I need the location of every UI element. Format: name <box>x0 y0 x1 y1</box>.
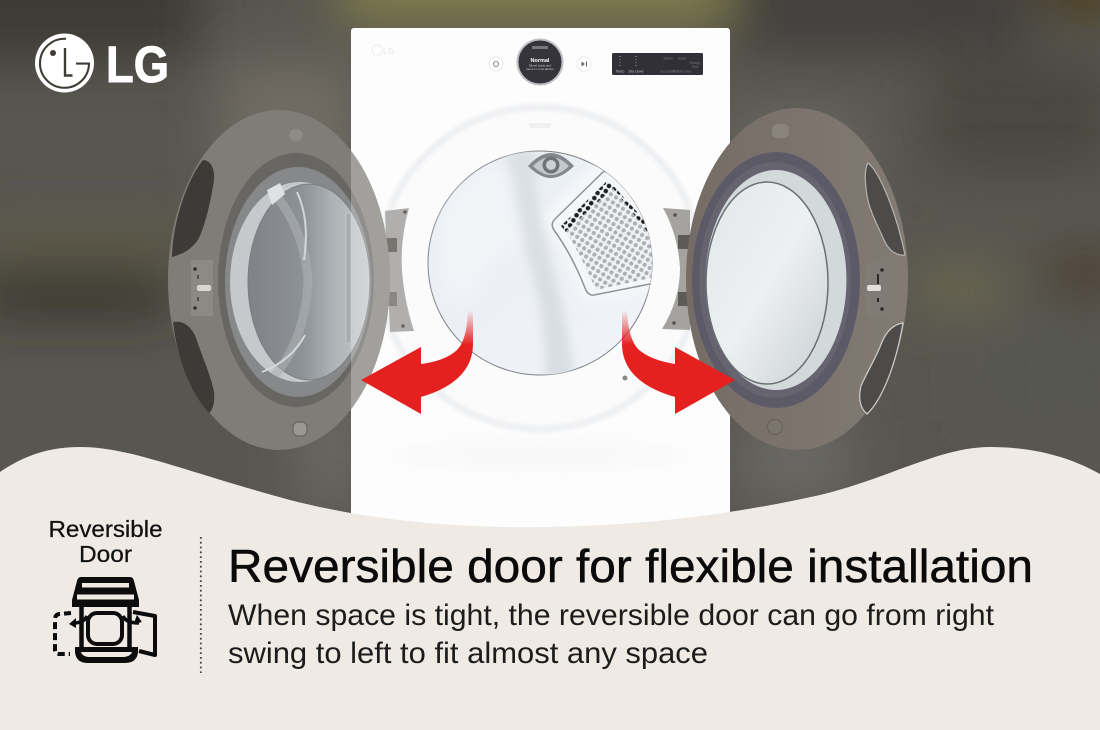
dotted divider <box>200 537 202 673</box>
right red arrow <box>622 310 735 414</box>
icon label: Door <box>79 541 132 567</box>
left door glass <box>230 182 370 382</box>
moisture sensor <box>528 153 574 178</box>
display panel: Damp <box>678 56 686 60</box>
right hinge plate <box>662 208 693 330</box>
left door knob top <box>290 128 302 142</box>
right door knob top <box>772 124 789 138</box>
description: swing to left to fit almost any space <box>228 637 708 670</box>
control dial <box>518 40 562 84</box>
power button <box>489 57 503 71</box>
left door gasket <box>218 153 374 407</box>
display panel: Eco Dash <box>661 70 675 74</box>
display panel: Temp <box>616 70 624 74</box>
control dial: items in most fabrics <box>526 67 554 71</box>
heading: Reversible door for flexible installation <box>228 540 1033 592</box>
icon: reversible door dryer <box>55 577 155 663</box>
right door ring <box>686 108 908 450</box>
right door latch <box>865 262 892 316</box>
display panel: Steam <box>663 56 673 60</box>
translucent door overlap on dryer <box>351 151 390 409</box>
left door knob bottom <box>293 422 307 436</box>
display panel: Energy <box>690 61 700 65</box>
display panel <box>612 53 703 75</box>
description: When space is tight, the reversible door can go from right <box>228 599 995 632</box>
cream wave panel <box>0 447 1100 730</box>
display panel: Dry Level <box>629 70 644 74</box>
left red arrow <box>361 310 473 414</box>
description <box>228 599 995 670</box>
left door handle top <box>172 160 214 257</box>
drum baffle shading <box>504 150 574 380</box>
right door knob bottom <box>768 420 782 434</box>
drum sensor screw <box>622 376 628 380</box>
right door <box>686 108 908 450</box>
icon label: Reversible <box>48 516 162 542</box>
dryer lower shadow <box>390 443 690 467</box>
dryer door opening ring <box>376 104 704 432</box>
right door glass <box>706 182 828 384</box>
drum interior <box>428 150 660 380</box>
start button <box>577 57 591 71</box>
lint filter grille <box>552 172 660 295</box>
right door glass ring <box>706 170 846 390</box>
right door handle bottom <box>860 323 903 414</box>
left hinge plate <box>384 208 414 332</box>
LG logo <box>35 34 169 93</box>
right door gasket <box>692 152 860 408</box>
left door ring <box>168 110 390 450</box>
logo wordmark: LG <box>106 36 169 93</box>
display panel: Wrinkle Care <box>673 70 691 74</box>
control dial: Normal <box>531 58 550 64</box>
left door latch <box>191 260 213 316</box>
dryer body <box>351 28 730 548</box>
logo emblem <box>35 34 94 92</box>
display panel: Time <box>692 65 699 69</box>
dryer logo mark: LG <box>383 47 394 56</box>
icon label <box>48 516 162 567</box>
control dial: Mixed loads and <box>529 64 551 68</box>
left door <box>168 100 396 460</box>
left door handle bottom <box>173 322 214 413</box>
right door handle top <box>865 163 905 255</box>
dryer logo mark <box>372 45 394 56</box>
